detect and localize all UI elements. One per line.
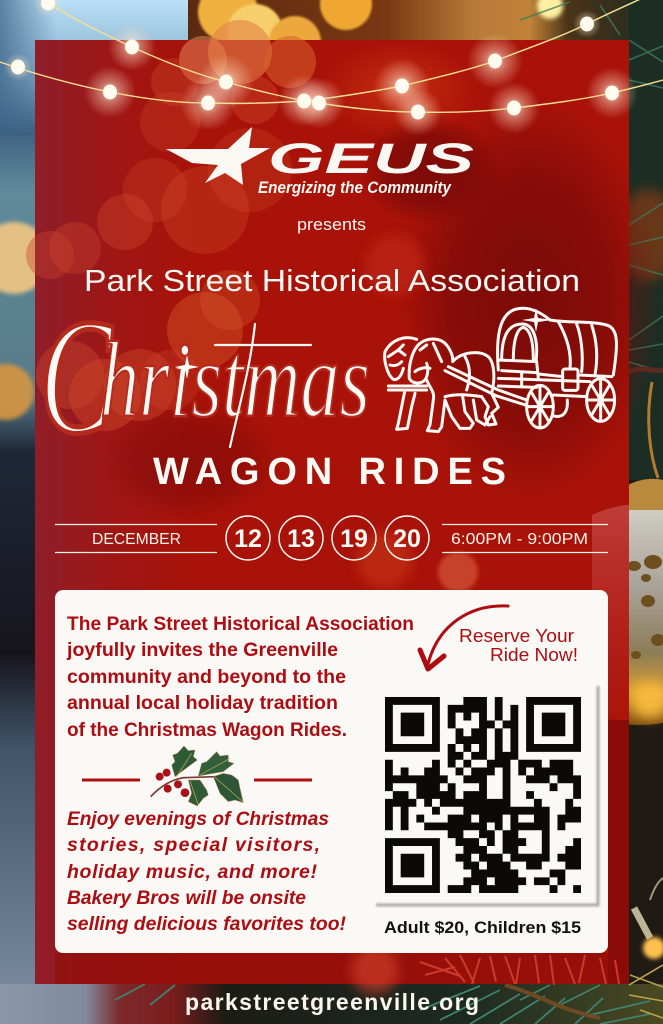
icon: curved arrow — [420, 606, 508, 669]
flourish: t crossbar and stem — [215, 324, 311, 447]
subtitle: WAGON RIDES: WAGON RIDES — [153, 451, 506, 493]
month label: DECEMBER — [92, 531, 181, 548]
event details paragraph: holiday music, and more! — [67, 861, 318, 883]
reserve call to action: Ride Now! — [490, 644, 578, 665]
divider with holly — [82, 746, 312, 806]
time label — [442, 524, 608, 552]
invitation paragraph: The Park Street Historical Association — [67, 613, 414, 635]
date row — [55, 516, 608, 560]
date badges: 13 — [287, 525, 315, 553]
event details paragraph — [67, 808, 346, 935]
date badges: 12 — [234, 525, 262, 553]
script title: Christmas: hristmas — [100, 321, 370, 440]
horse legs — [427, 380, 490, 432]
date badges: 19 — [340, 525, 368, 553]
horse heads — [385, 338, 417, 380]
warm bokeh top — [188, 0, 663, 44]
wagon pole — [445, 367, 527, 405]
month label — [55, 524, 217, 552]
presents label: presents — [297, 215, 366, 234]
panel: details card — [55, 590, 608, 953]
script title: Christmas — [40, 285, 370, 468]
event details paragraph: Bakery Bros will be onsite — [67, 887, 306, 909]
QR shadow — [376, 686, 598, 905]
sky top left — [0, 0, 190, 135]
invitation paragraph: community and beyond to the — [67, 666, 346, 688]
icon: sparkle — [175, 355, 199, 379]
time label: 6:00PM - 9:00PM — [451, 531, 588, 548]
ornament reflection — [592, 505, 629, 722]
street scene left — [0, 100, 36, 1024]
icon: horse-drawn covered wagon — [385, 308, 616, 432]
bottom boughs — [0, 984, 663, 1024]
invitation paragraph — [66, 613, 414, 741]
reserve call to action — [459, 625, 578, 665]
event details paragraph: stories, special visitors, — [67, 834, 320, 856]
pricing: Adult $20, Children $15 — [384, 919, 581, 937]
invitation paragraph: annual local holiday tradition — [67, 692, 338, 714]
icon: wagon sparkle — [522, 308, 552, 332]
ornament — [527, 479, 663, 725]
logo: GEUS — [166, 127, 475, 197]
invitation paragraph: joyfully invites the Greenville — [66, 639, 338, 661]
string lights — [0, 0, 663, 136]
website footer: parkstreetgreenville.org — [185, 989, 479, 1015]
bokeh circles — [26, 20, 478, 592]
event details paragraph: selling delicious favorites too! — [67, 913, 346, 935]
logo wordmark: GEUS — [268, 135, 475, 183]
organizer heading: Park Street Historical Association — [84, 263, 580, 298]
logo tagline: Energizing the Community — [258, 179, 452, 197]
invitation paragraph: of the Christmas Wagon Rides. — [67, 719, 347, 741]
reserve call to action: Reserve Your — [459, 625, 574, 646]
date badges — [226, 516, 429, 560]
wagon cover — [498, 308, 616, 375]
icon: winged star — [166, 127, 270, 185]
evergreen right — [629, 0, 663, 480]
bulb bottom right — [634, 908, 650, 938]
date badges: 20 — [393, 525, 421, 553]
wagon wheels — [527, 385, 553, 428]
event details paragraph: Enjoy evenings of Christmas — [67, 808, 329, 830]
QR code — [385, 697, 581, 893]
script title: Christmas: C — [40, 285, 113, 468]
wagon bed — [498, 360, 612, 397]
